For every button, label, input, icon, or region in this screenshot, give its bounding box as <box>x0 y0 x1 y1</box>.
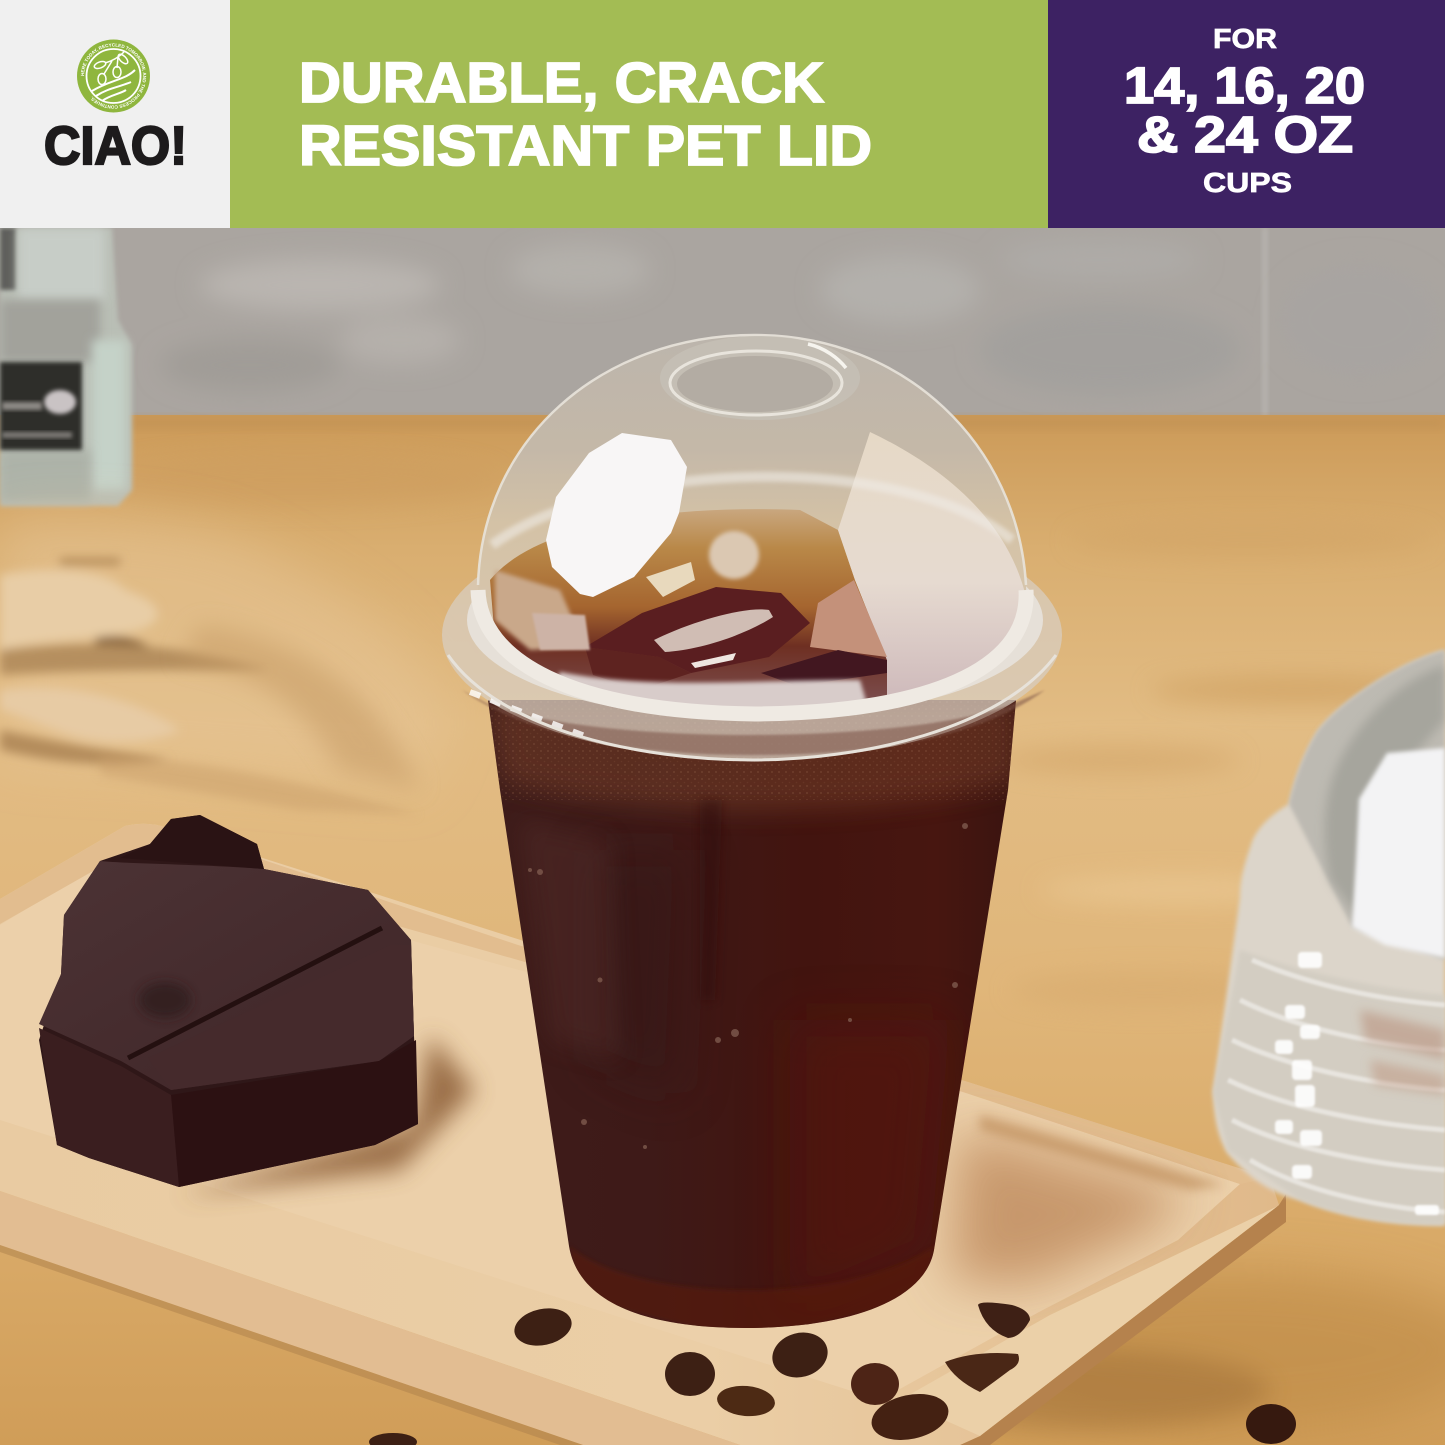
logo panel <box>0 0 230 228</box>
lid outer rim <box>442 577 1062 758</box>
plastic cup with iced coffee <box>480 700 1020 1340</box>
chocolate brownie <box>39 815 475 1195</box>
headline text: DURABLE, CRACK <box>299 51 824 115</box>
dried wheat <box>0 516 450 815</box>
headline text: RESISTANT PET LID <box>299 114 872 178</box>
dome lid <box>442 335 1062 760</box>
logo wordmark: CIAO! <box>44 116 187 176</box>
brownie shadow <box>180 1035 475 1195</box>
glass bottle <box>0 228 132 506</box>
wall background <box>0 228 1445 423</box>
straw hole on lid <box>660 336 860 420</box>
icon: circular olive badge: HERE TODAY, RECYCLED TOMORROW, AND THE PROCESS CONTINUES. <box>80 43 146 109</box>
wooden table <box>0 415 1445 1445</box>
right pale reflection wedge <box>838 432 1030 705</box>
banner: headline <box>230 0 1048 228</box>
tray top surface <box>0 824 1279 1445</box>
size text: CUPS <box>1203 167 1292 198</box>
stacked lids at right <box>1213 650 1445 1225</box>
wooden tray <box>0 824 1286 1445</box>
drink seen through dome <box>490 509 887 705</box>
coffee beans <box>369 1302 1296 1445</box>
tray front face <box>0 1191 740 1445</box>
lid inner rim <box>478 590 1026 714</box>
size text: 14, 16, 20 <box>1124 57 1365 114</box>
headline text <box>299 51 872 178</box>
lid reflection <box>546 433 687 597</box>
panel: cup sizes <box>1048 0 1445 228</box>
size text <box>1124 23 1365 198</box>
size text: FOR <box>1213 23 1277 54</box>
tray right side <box>960 1194 1286 1445</box>
size text: & 24 OZ <box>1137 106 1353 163</box>
